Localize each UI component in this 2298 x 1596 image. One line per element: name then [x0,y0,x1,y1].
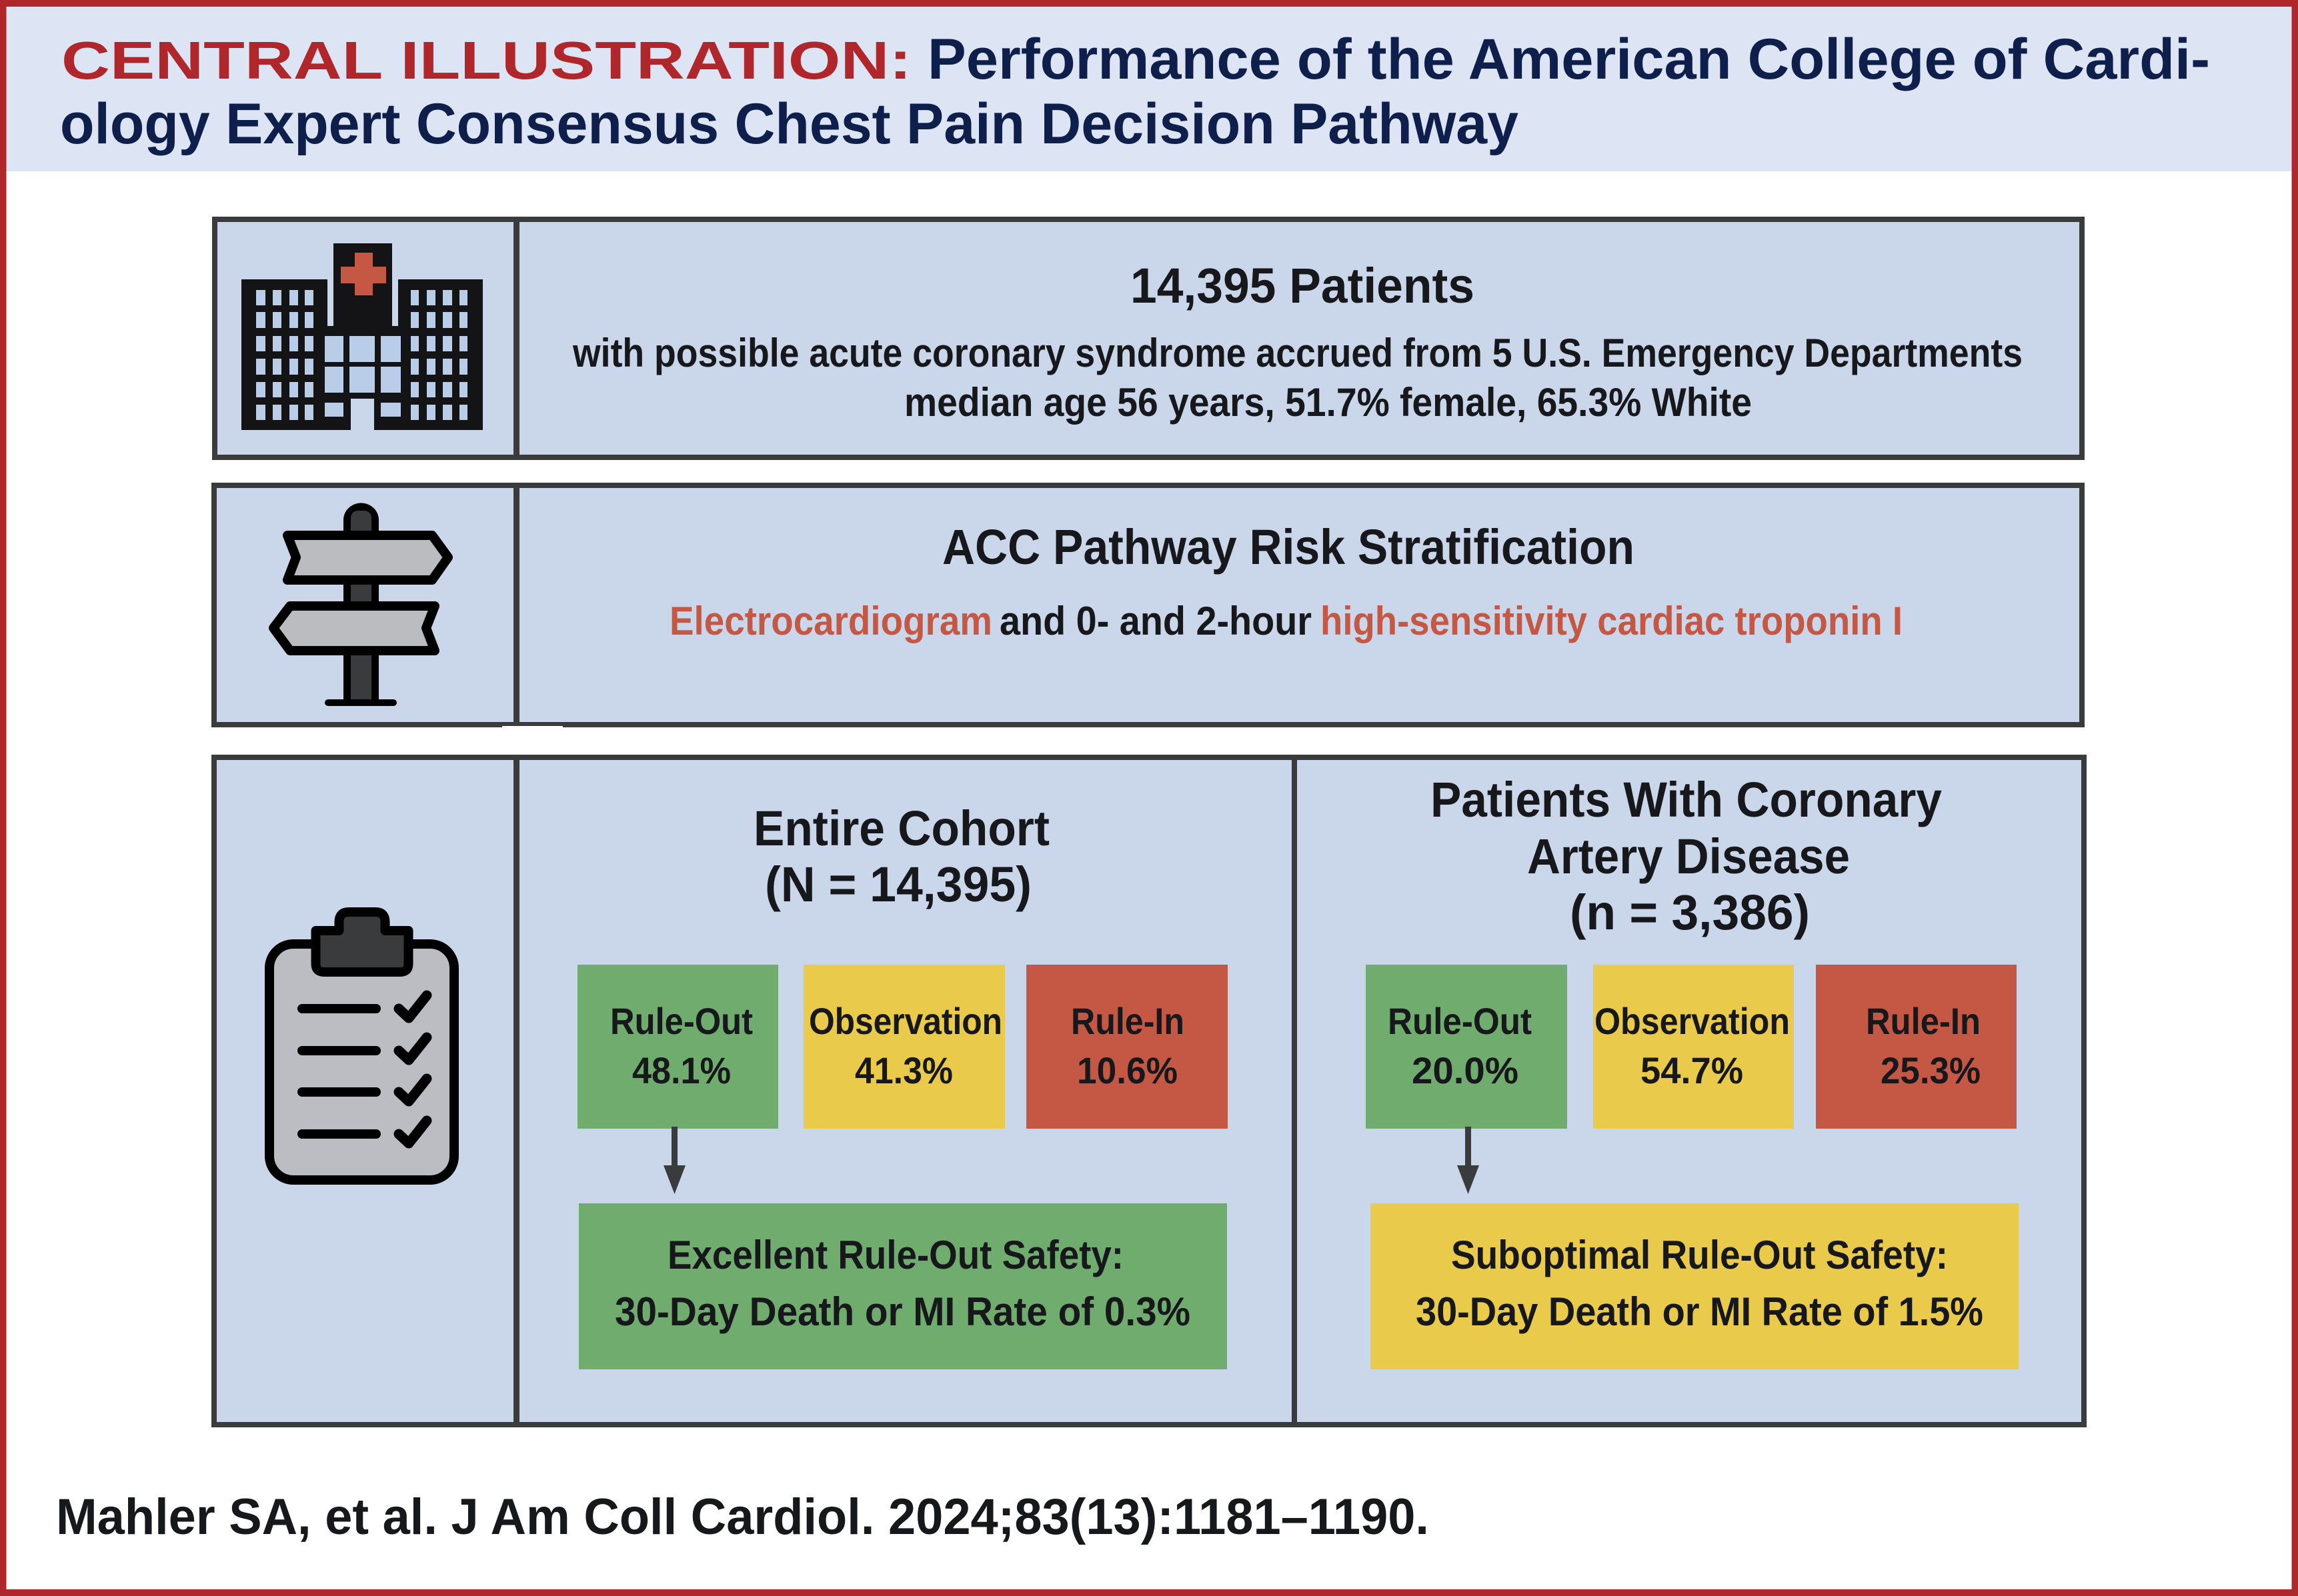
text: pathway components: high-sensitivity cardiac troponin I [1320,599,1903,643]
title line 1: Performance of the American College of Cardi- [928,27,2210,91]
icon: clipboard [269,912,454,1180]
box: rule-out safety: Excellent Rule-Out Safety: [668,1233,1124,1277]
citation: Mahler SA, et al. J Am Coll Cardiol. 2024;83(13):1181–1190. [56,1489,1429,1545]
text: enrollment: with possible acute coronary syndrome accrued from 5 U.S. Emergency Departments [572,331,2023,375]
box: rule-in [1026,965,1228,1129]
text: pathway components: and 0- and 2-hour [1000,599,1312,643]
box: observation [1593,965,1794,1129]
icon: hospital [241,243,483,430]
box: rule-in [1816,965,2017,1129]
arrow [664,1127,686,1194]
box: observation: Observation [809,1000,1002,1042]
title label: CENTRAL ILLUSTRATION: [61,31,912,90]
box: rule-out safety: Suboptimal Rule-Out Safety: [1451,1233,1948,1277]
title banner [6,7,2292,171]
box: rule-out safety: 30-Day Death or MI Rate of 0.3% [615,1289,1190,1334]
box: rule-out safety [579,1203,1227,1369]
box: rule-out: Rule-Out [1388,1000,1532,1042]
box: observation: 54.7% [1640,1049,1743,1091]
box: observation: 41.3% [855,1049,953,1091]
icon: signpost [273,503,448,706]
title line 2: ology Expert Consensus Chest Pain Decision Pathway [60,92,1518,156]
box: observation: Observation [1594,1000,1790,1042]
panel: results [214,757,2084,1425]
box: rule-in: Rule-In [1071,1000,1184,1042]
box: rule-out [1366,965,1567,1129]
box: rule-out: Rule-Out [610,1000,753,1042]
heading: CAD size: (n = 3,386) [1570,885,1810,940]
arrow [1457,1127,1479,1194]
heading: cohort size: (N = 14,395) [765,857,1032,912]
heading: CAD line 1: Patients With Coronary [1430,772,1942,827]
box: rule-out [578,965,778,1129]
heading: ACC pathway: ACC Pathway Risk Stratification [942,519,1634,575]
panel: risk stratification [214,485,2082,728]
box: rule-out safety [1370,1203,2019,1369]
box: observation [804,965,1005,1129]
text: pathway components: Electrocardiogram [670,599,992,643]
box: rule-in: 10.6% [1077,1049,1178,1091]
box: rule-out safety: 30-Day Death or MI Rate of 1.5% [1416,1289,1983,1334]
panel: patients [215,219,2082,457]
box: rule-in: 25.3% [1881,1049,1981,1091]
column: coronary artery disease [1366,772,2019,1369]
text: demographics: median age 56 years, 51.7% female, 65.3% White [904,380,1752,425]
heading: patients: 14,395 Patients [1130,258,1474,313]
heading: CAD line 2: Artery Disease [1527,829,1850,884]
box: rule-out: 20.0% [1412,1049,1518,1091]
column: entire cohort [578,801,1228,1369]
box: rule-in: Rule-In [1866,1000,1981,1042]
box: rule-out: 48.1% [632,1049,731,1091]
text: pathway components [670,599,1903,643]
heading: entire cohort: Entire Cohort [754,801,1050,856]
